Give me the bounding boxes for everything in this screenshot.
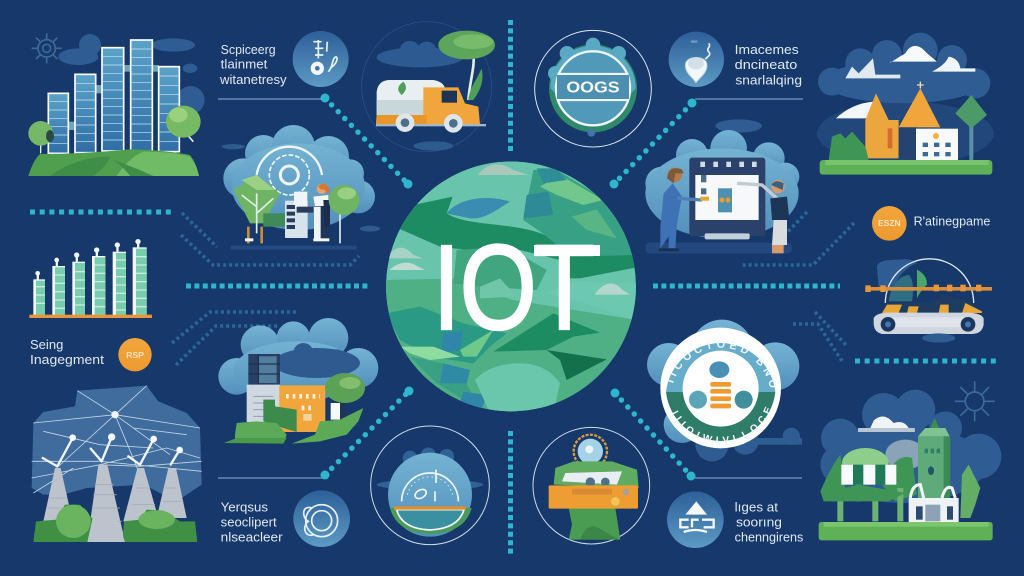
trees and lawn [829, 132, 869, 160]
gear rings [257, 147, 322, 195]
icon: orange RSP badge [118, 338, 152, 371]
text block: top left label: witanetresy [219, 73, 287, 87]
text block: top left label: Scpiceerg [221, 43, 276, 57]
panel: smart car with roof rack [865, 259, 992, 343]
towers [43, 465, 187, 541]
panel: OOGS badge [535, 30, 651, 147]
icon: lightbulb circle: ooo [691, 39, 698, 44]
bar chart: sensor columns [29, 239, 152, 318]
panel: village with clouds [817, 33, 994, 175]
panel: technician with gear cloud [222, 125, 380, 250]
orange wing [279, 385, 325, 432]
icon: faint sun [955, 381, 995, 421]
panel: park with green tower [819, 381, 1001, 540]
text block: top right label: Imacemes [735, 43, 799, 57]
left tree [233, 175, 280, 223]
icon: link circle [667, 491, 724, 548]
text block: Yerqsus label: seoclipert [221, 515, 277, 529]
text block: top right label [735, 43, 802, 87]
trees and white awning [842, 448, 889, 478]
panel: data badge [647, 320, 802, 462]
white building [909, 498, 959, 525]
panel: OOGS badge: OOGS [566, 80, 620, 97]
icon: tools circle [293, 31, 349, 87]
text block: top left label: tlainmet [221, 58, 268, 72]
panel: gauge in circle [371, 426, 489, 545]
monitor [689, 158, 765, 236]
text: Ratinegpame label: R'atinegpame [914, 215, 990, 229]
ring lettering: IICOCTOED BNO [666, 340, 776, 388]
text block: Yerqsus label: Yerqsus [221, 500, 268, 514]
text block: bottom right label: chenngirens [735, 531, 803, 545]
text block: Yerqsus label [221, 500, 283, 544]
panel: skyscrapers on a green hill [28, 33, 205, 176]
text block: Seing Inagegment [30, 338, 105, 367]
text block: bottom right label [735, 500, 803, 545]
church towers [865, 93, 899, 158]
right tree [337, 207, 342, 243]
icon: faint sun [32, 33, 62, 63]
text block: top left label [219, 43, 287, 87]
panel: delivery truck [362, 22, 495, 152]
title: IOT [433, 221, 600, 355]
green tower [918, 436, 950, 503]
truck body [377, 80, 445, 115]
icon: orange RSP badge: RSP [126, 350, 144, 360]
icon: orange badge [872, 206, 907, 241]
tree and bushes [342, 405, 348, 421]
green hill [28, 149, 199, 176]
icon: ring circle [293, 490, 350, 547]
text block: Seing Inagegment: Seing [30, 338, 63, 352]
text block: top right label: snarlalqing [735, 73, 802, 87]
panel: machine in circle [533, 427, 650, 544]
building columns [48, 40, 179, 153]
text block: Seing Inagegment: Inagegment [30, 353, 105, 367]
text block: bottom right label: soorıng [736, 516, 782, 530]
coin stack [709, 361, 729, 378]
icon: lightbulb circle [669, 32, 724, 87]
trees [39, 140, 43, 153]
presenter left [660, 183, 682, 248]
icon: orange badge: ESZN [878, 219, 901, 228]
server machine [285, 201, 308, 238]
person [317, 184, 327, 194]
panel: data badge: IIIOIWIVLLOCE [672, 406, 772, 444]
panel: monitor with two people [645, 119, 799, 253]
green bushes [33, 505, 95, 542]
title: IOT: O [460, 221, 537, 355]
panel: transmission towers network [32, 386, 202, 542]
tower block [248, 354, 280, 385]
text block: Yerqsus label: nlseacleer [221, 530, 283, 544]
lawn [819, 522, 993, 540]
title: IOT: I [433, 221, 460, 355]
presenter right [737, 183, 779, 200]
central globe with IOT title [386, 161, 637, 417]
text block: bottom right label: lıges at [735, 500, 779, 514]
text block: top right label: dncineato [735, 58, 797, 72]
title: IOT: T [534, 221, 595, 355]
panel: office building with cloud [218, 318, 378, 444]
